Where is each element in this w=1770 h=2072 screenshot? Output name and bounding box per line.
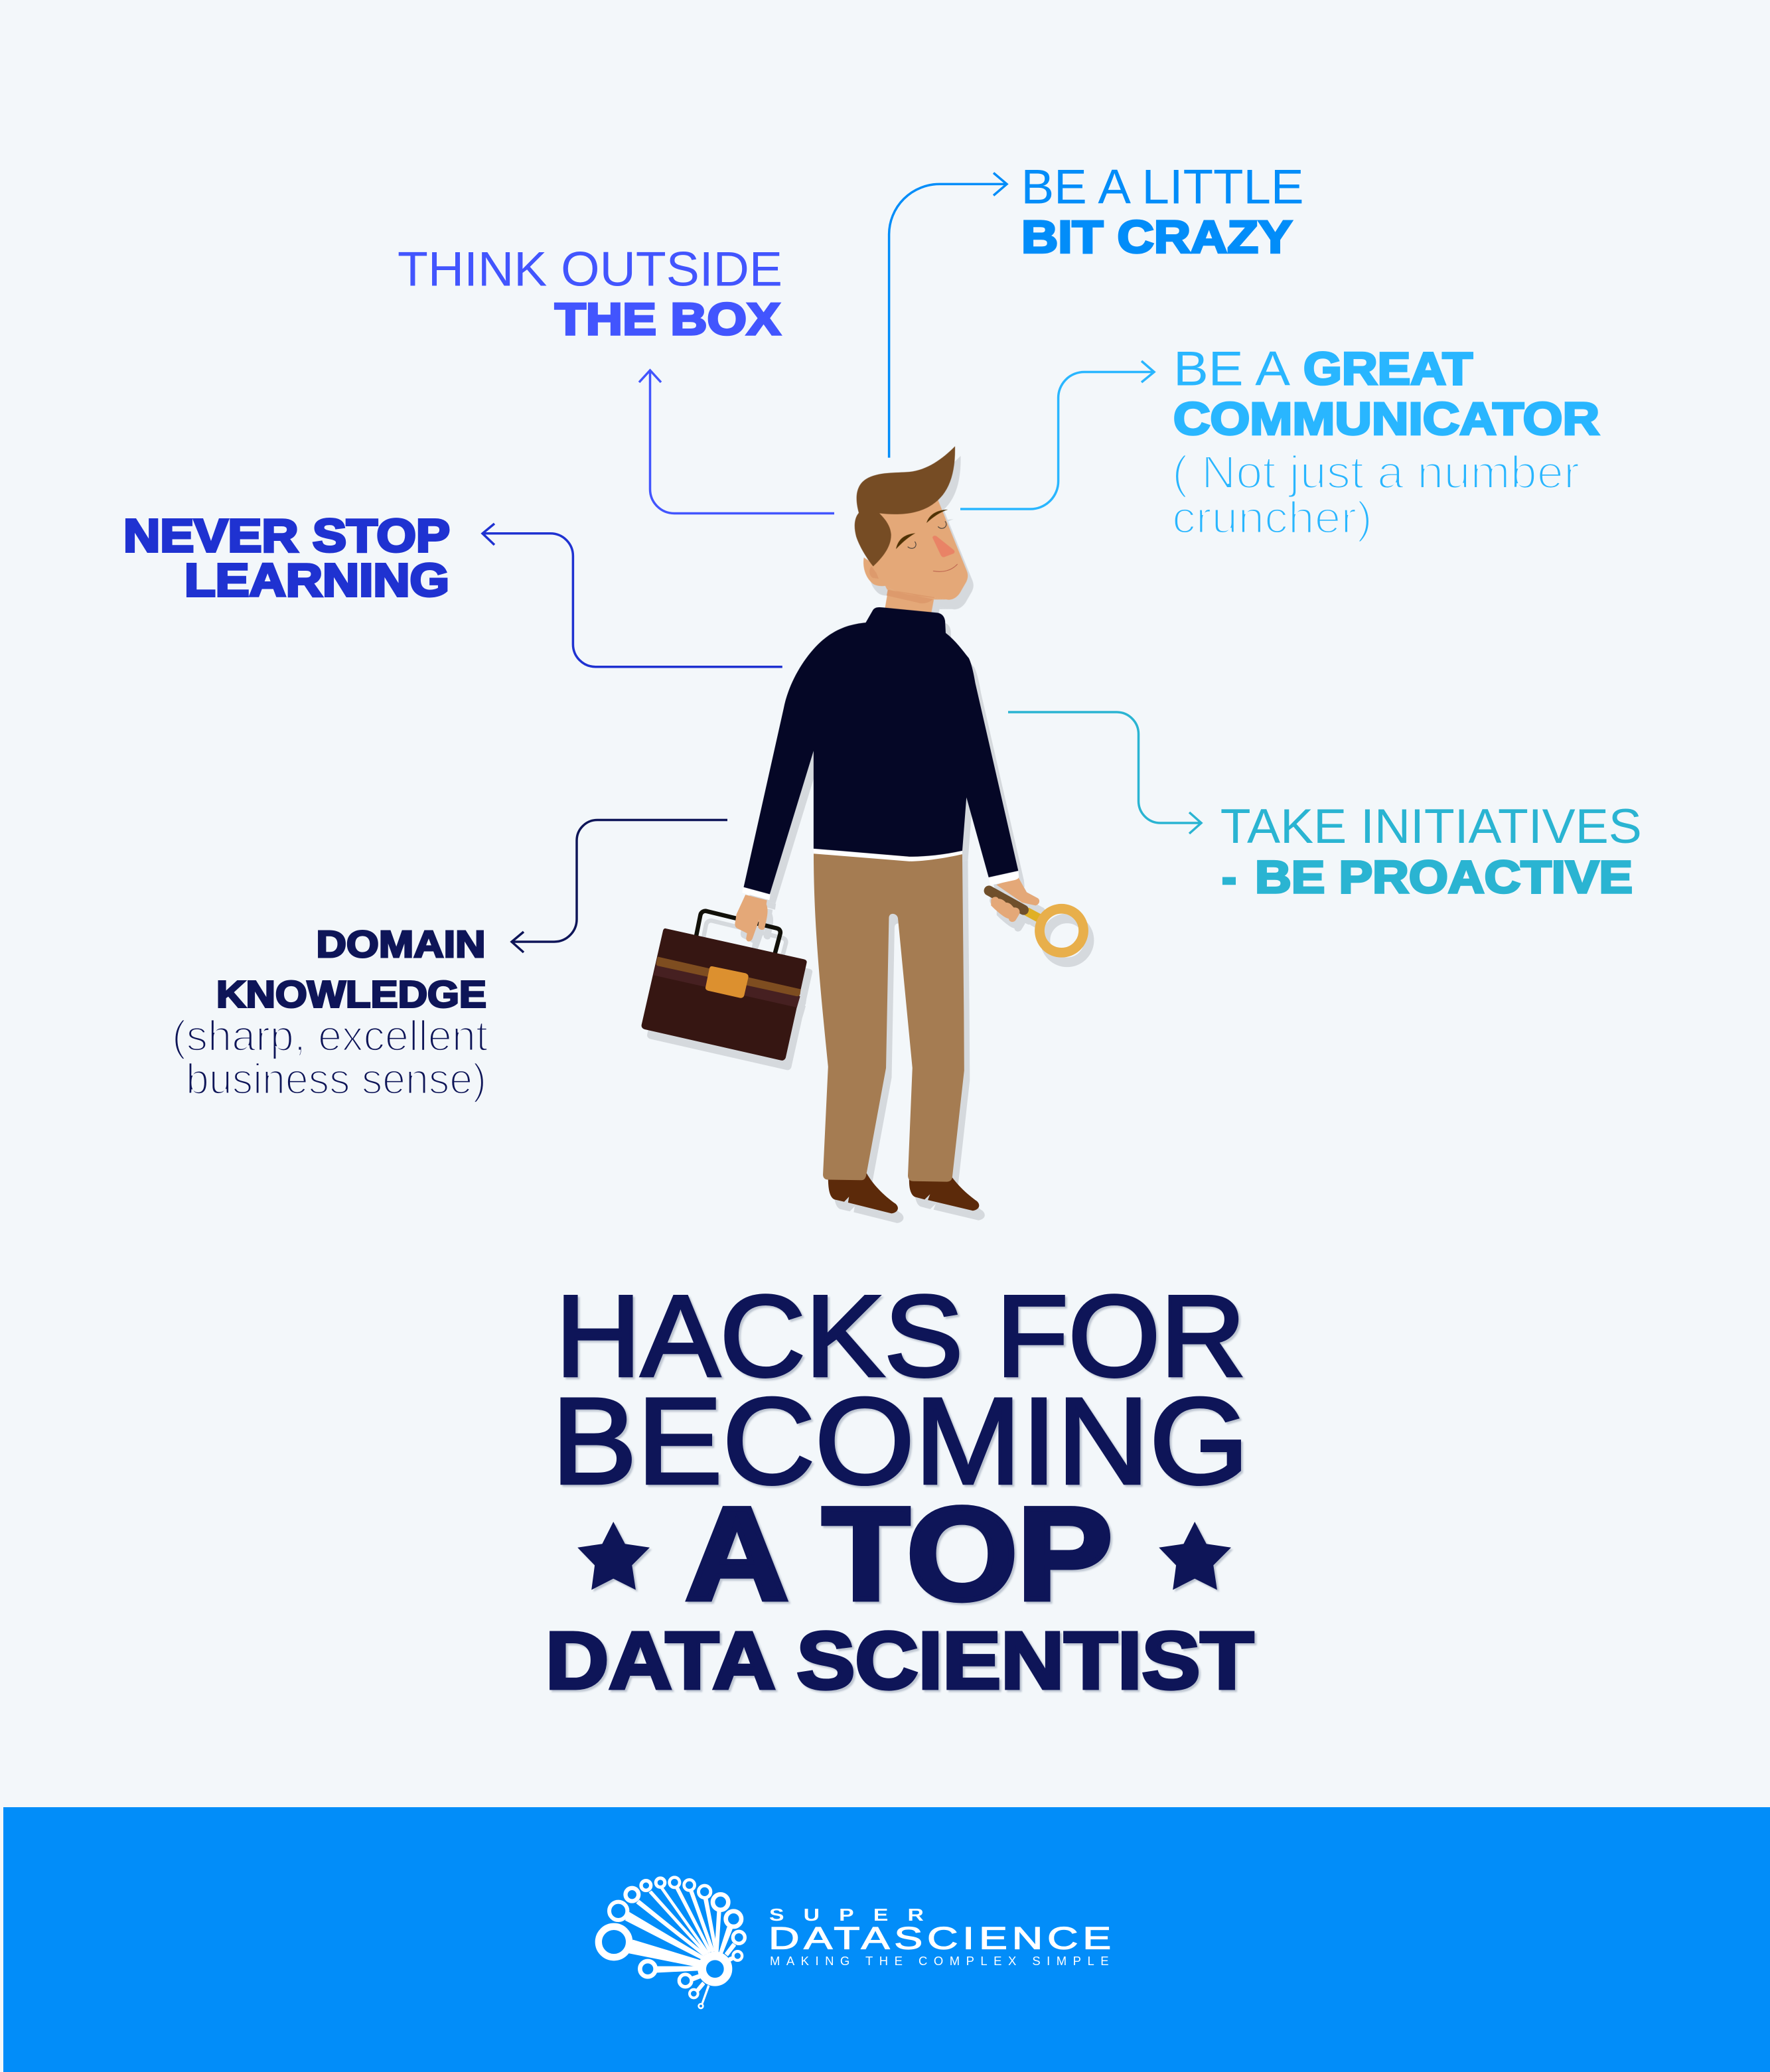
shoes [828,1173,979,1213]
arrow: take initiatives [1008,712,1201,834]
label: domain knowledge [172,923,488,1103]
arrow: be a great communicator [960,361,1154,509]
label: think outside the box [398,243,782,344]
label: never stop learning: LEARNING [184,554,449,606]
label: domain knowledge: (sharp, excellent [172,1011,488,1060]
label: take initiatives be proactive: - [1222,851,1236,903]
label: be a great communicator: cruncher) [1172,492,1372,543]
footer banner [3,1807,1770,2072]
illustration: data scientist man [642,446,1084,1213]
title: hacks for becoming a top data scientist: A TOP [686,1480,1112,1627]
logo wordmark [769,1905,1116,1968]
logo wordmark: MAKING THE COMPLEX SIMPLE [770,1954,1115,1968]
label: domain knowledge: KNOWLEDGE [216,973,486,1015]
left hand [735,895,768,942]
label: take initiatives be proactive [1220,800,1642,903]
title: hacks for becoming a top data scientist [546,1271,1254,1706]
arrow: never stop learning [482,524,782,667]
label: be a great communicator [1172,342,1599,543]
arrow: think outside the box [639,370,834,514]
sweater [744,607,1018,894]
shirt hem and cuffs [742,848,1019,900]
label: domain knowledge: business sense) [186,1055,486,1103]
label: think outside the box: THINK OUTSIDE [398,243,782,297]
arrow: be a little bit crazy [889,173,1007,458]
key and right hand [989,877,1084,952]
title: hacks for becoming a top data scientist: DATA SCIENTIST [546,1615,1254,1706]
arrow: domain knowledge [512,820,727,952]
label: be a great communicator: BE A [1173,342,1290,396]
icon: right star [1159,1522,1231,1590]
label: be a great communicator: GREAT [1303,343,1473,394]
label: never stop learning: NEVER STOP [123,510,450,561]
head [855,446,968,613]
label: be a great communicator: COMMUNICATOR [1173,393,1599,445]
logo mark: brain network [599,1878,745,2008]
label: be a great communicator: ( Not just a number [1172,446,1580,498]
label: take initiatives be proactive: TAKE INITIATIVES [1220,800,1642,853]
label: take initiatives be proactive: BE PROACTIVE [1255,851,1633,903]
label: think outside the box: THE BOX [555,294,780,344]
title: hacks for becoming a top data scientist: HACKS FOR [555,1271,1246,1400]
label: never stop learning [123,510,450,606]
trousers [814,852,964,1182]
logo wordmark: SUPER [769,1905,943,1925]
label: be a little bit crazy [1021,161,1303,263]
label: domain knowledge: DOMAIN [316,923,486,966]
label: be a little bit crazy: BE A LITTLE [1021,161,1303,214]
icon: left star [577,1522,650,1590]
label: be a little bit crazy: BIT CRAZY [1021,211,1292,263]
logo wordmark: DATASCIENCE [769,1921,1116,1957]
icon: briefcase [642,911,807,1061]
title: hacks for becoming a top data scientist: BECOMING [552,1373,1249,1510]
